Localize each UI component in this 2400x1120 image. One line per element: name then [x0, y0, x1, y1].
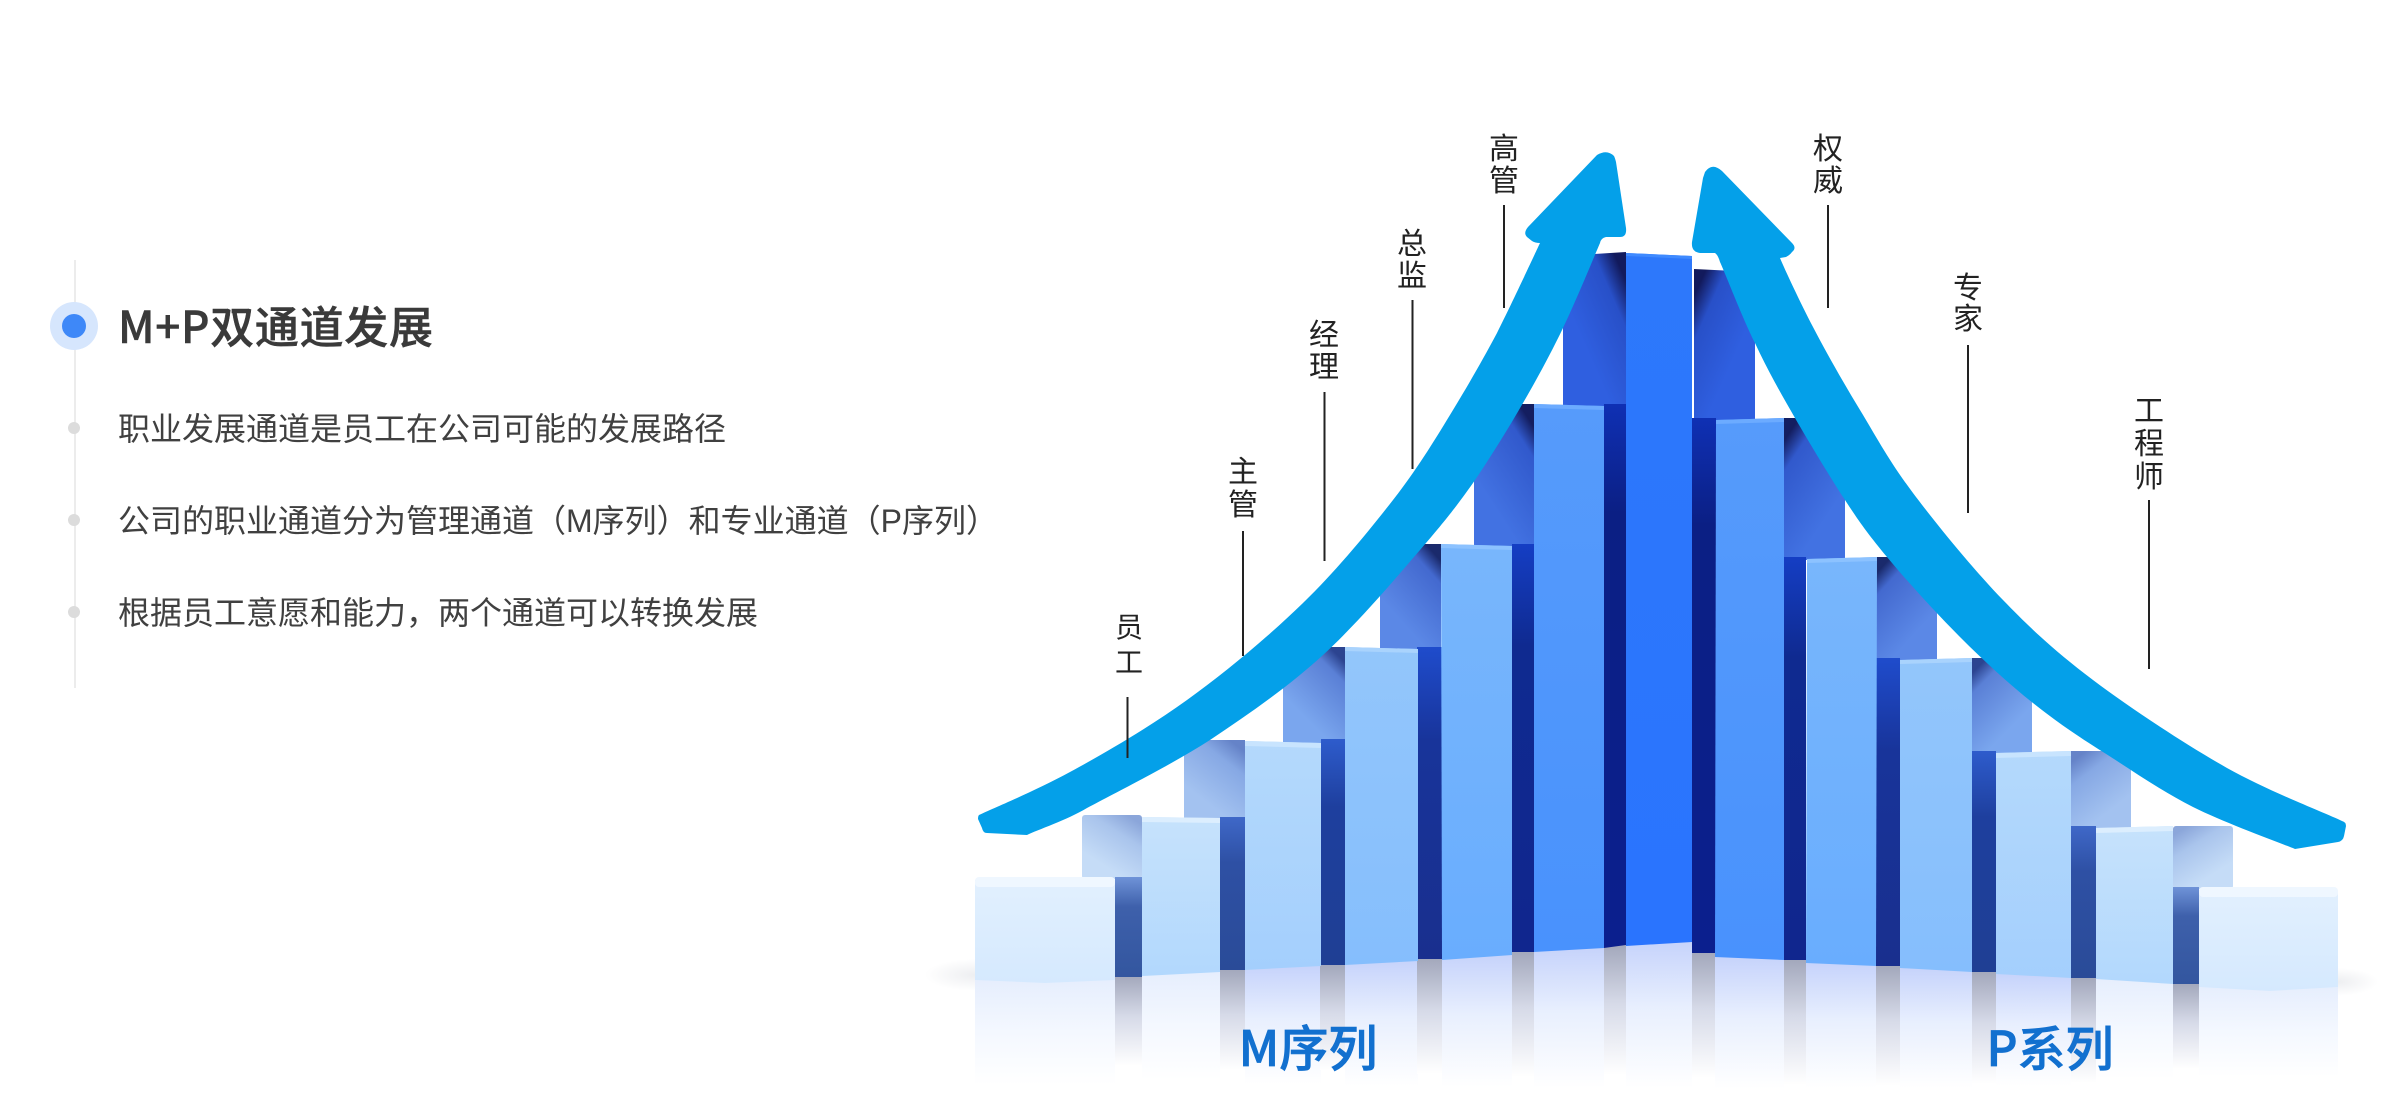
label: 工程师 with leader: 程	[2134, 428, 2164, 461]
label: 工程师 with leader: 工	[2134, 395, 2164, 428]
heading: M+P双通道发展	[118, 292, 434, 356]
label: M序列: M序列	[1239, 1010, 1377, 1081]
bar: M1 cube	[975, 877, 1115, 983]
label: 工程师 with leader: 师	[2134, 461, 2164, 494]
label: 员工 with leader	[1115, 612, 1143, 758]
bar: P5	[1806, 557, 1937, 966]
label: 权威 with leader: 威	[1813, 165, 1843, 198]
label: 经理 with leader: 理	[1309, 351, 1339, 384]
label: 主管 with leader: 主	[1228, 456, 1258, 489]
label: 经理 with leader	[1309, 319, 1339, 561]
label: 主管 with leader: 管	[1228, 489, 1258, 522]
bar: P2	[2096, 826, 2233, 984]
bar: M5	[1380, 544, 1512, 960]
bar: M7 and P7 central	[1563, 252, 1755, 953]
label: P系列: P系列	[1986, 1010, 2114, 1080]
label: 总监 with leader	[1397, 228, 1427, 469]
label: 经理 with leader: 经	[1309, 319, 1339, 352]
timeline line	[74, 260, 76, 688]
bar: P3	[1996, 751, 2131, 978]
bullet 3	[68, 606, 80, 618]
ground shadow and reflections	[925, 942, 2378, 1089]
label: 总监 with leader: 总	[1397, 228, 1427, 261]
label: 权威 with leader	[1813, 133, 1843, 308]
label: 员工 with leader: 工	[1115, 647, 1143, 678]
label: 工程师 with leader	[2134, 395, 2164, 669]
bar: P6	[1715, 418, 1845, 960]
text: item 1: 职业发展通道是员工在公司可能的发展路径	[118, 411, 726, 447]
icon: heading bullet	[50, 302, 98, 350]
bullet 1	[68, 422, 80, 434]
bar: M4	[1283, 647, 1418, 965]
bar: P4	[1900, 658, 2032, 972]
label: 主管 with leader	[1228, 456, 1258, 656]
label: 高管 with leader	[1489, 133, 1519, 308]
bullet 2	[68, 514, 80, 526]
arrow: P channel	[1692, 167, 2346, 849]
label: 总监 with leader: 监	[1397, 260, 1427, 293]
label: 员工 with leader: 员	[1115, 612, 1143, 643]
panel: M+P description	[50, 260, 998, 688]
label: 专家 with leader: 家	[1953, 303, 1983, 336]
bar: P1 cube	[2199, 887, 2338, 991]
arrow: M channel	[978, 152, 1626, 835]
bar: M6	[1474, 404, 1604, 952]
label: 专家 with leader: 专	[1953, 272, 1983, 305]
text: item 2: 公司的职业通道分为管理通道（M序列）和专业通道（P序列）	[118, 503, 998, 539]
bar: M3	[1184, 740, 1321, 970]
bar: M2	[1082, 815, 1220, 977]
label: 专家 with leader	[1953, 272, 1983, 513]
label: 高管 with leader: 高	[1489, 133, 1519, 166]
text: item 3: 根据员工意愿和能力，两个通道可以转换发展	[118, 595, 758, 631]
label: 权威 with leader: 权	[1813, 133, 1843, 166]
label: 高管 with leader: 管	[1489, 165, 1519, 198]
